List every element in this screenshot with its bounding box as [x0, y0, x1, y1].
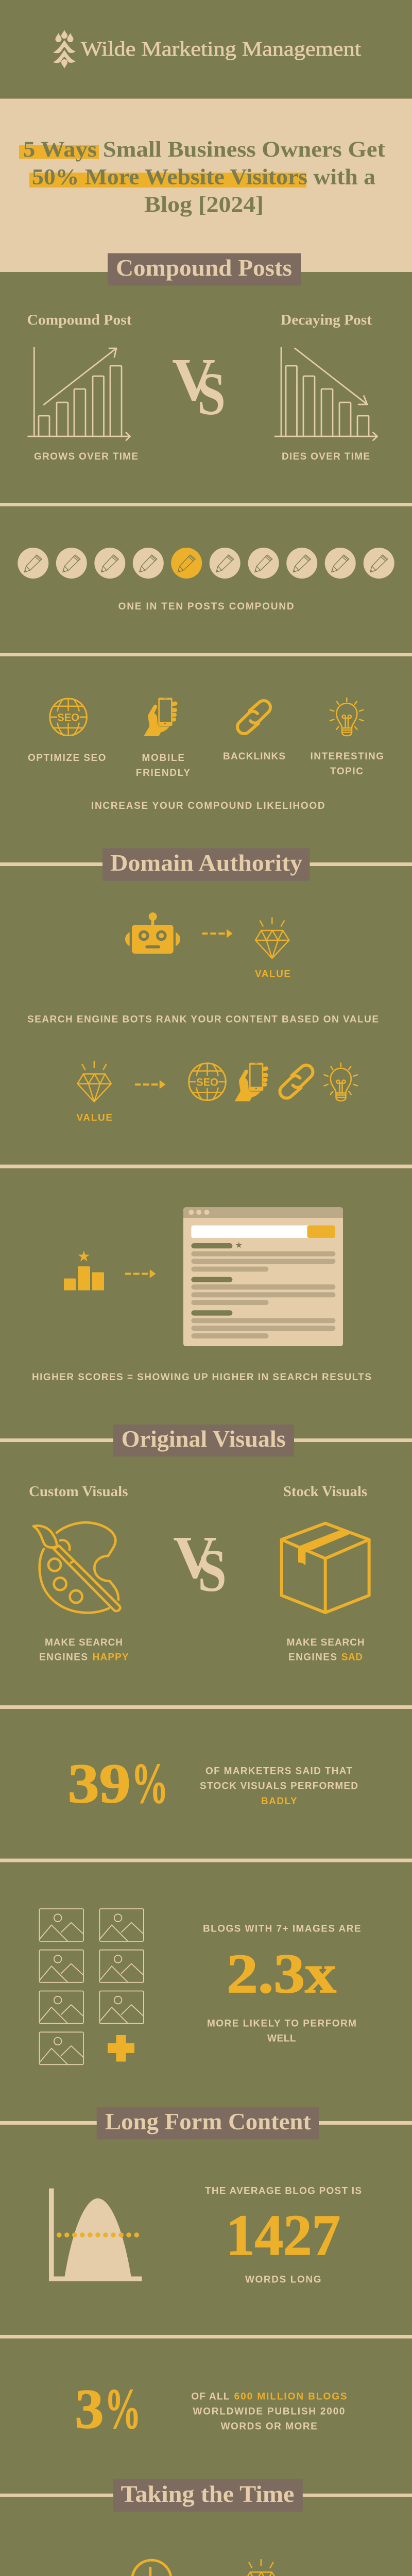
panel: stock visuals: MAKE SEARCH	[287, 1637, 365, 1648]
heading: Original Visuals: Original Visuals	[122, 1426, 286, 1452]
panel: compound post: Compound Post	[27, 312, 132, 328]
panel: compound factors: BACKLINKS	[223, 751, 285, 762]
stat: 2.3x: WELL	[267, 2033, 296, 2044]
icon: clock	[132, 2560, 171, 2576]
panel: compound factors: MOBILE	[142, 753, 184, 764]
arrow	[125, 1269, 156, 1278]
panel: compound factors: OPTIMIZE SEO	[28, 753, 106, 764]
panel: compound factors: TOPIC	[330, 766, 363, 777]
panel: stock visuals: Stock Visuals	[283, 1484, 367, 1500]
VS mark: V	[172, 346, 215, 413]
stat: 39%: BADLY	[261, 1796, 297, 1807]
stat: 3%	[75, 2377, 347, 2441]
header logo	[53, 30, 361, 69]
icon: mobile in hand	[144, 698, 175, 736]
icon: robot	[125, 912, 180, 954]
panel: custom visuals	[29, 1484, 129, 1663]
stat: 3%: %	[105, 2377, 141, 2441]
panel: decaying post: DIES OVER TIME	[282, 451, 370, 462]
icon: light bulb	[330, 698, 363, 736]
panel: compound factors: INTERESTING	[310, 751, 384, 762]
VS mark	[172, 346, 226, 428]
panel: one in ten posts: ONE IN TEN POSTS COMPOUND	[118, 601, 294, 612]
arrow	[202, 929, 233, 938]
icon: diamond	[77, 1061, 111, 1101]
heading: Compound Posts: Compound Posts	[116, 255, 292, 281]
panel: custom visuals: MAKE SEARCH	[45, 1637, 123, 1648]
stat: 2.3x: 2.3x	[227, 1943, 336, 2005]
panel: higher scores: HIGHER SCORES = SHOWING UP HIGHER IN SEARCH RESULTS	[32, 1372, 371, 1383]
stat: 1427: WORDS LONG	[245, 2275, 321, 2285]
panel: compound post: GROWS OVER TIME	[34, 451, 138, 462]
panel: bots rank on value: VALUE	[76, 1113, 112, 1123]
icon: podium with star	[64, 1250, 104, 1290]
icon: diamond	[255, 918, 289, 958]
VS mark: V	[173, 1523, 217, 1591]
panel: bots rank on value	[27, 912, 379, 1123]
stat: 39%: 39	[68, 1753, 131, 1815]
stat: 39%	[68, 1752, 358, 1816]
panel: compound factors: INCREASE YOUR COMPOUND LIKELIHOOD	[91, 801, 325, 811]
icon: mobile in hand	[235, 1063, 266, 1101]
panel: compound post	[27, 312, 138, 462]
icon: chain link	[280, 1065, 313, 1098]
panel: custom visuals: ENGINES	[39, 1652, 88, 1663]
stat: 3%: 3	[75, 2379, 104, 2440]
panel: bots rank on value: VALUE	[255, 969, 290, 980]
icon: cardboard box	[282, 1523, 369, 1613]
stat: 1427: 1427	[226, 2204, 340, 2267]
panel: decaying post: Decaying Post	[281, 312, 372, 328]
panel: decaying post	[275, 312, 377, 462]
panel: higher scores	[32, 1207, 371, 1383]
stat: 39%: %	[131, 1752, 168, 1816]
title panel	[0, 99, 412, 272]
panel: stock visuals: SAD	[341, 1652, 363, 1663]
icon: paint palette	[33, 1522, 120, 1613]
arrow	[135, 1080, 165, 1089]
panel: time to value	[62, 2560, 350, 2576]
title panel: 5 Ways Small Business Owners Get	[23, 138, 386, 162]
stat: 1427: THE AVERAGE BLOG POST IS	[205, 2185, 362, 2197]
panel: stock visuals	[282, 1484, 369, 1663]
stat: 39%: OF MARKETERS SAID THAT	[205, 1766, 352, 1777]
stat: 39%: STOCK VISUALS PERFORMED	[200, 1781, 358, 1792]
stat: 1427	[205, 2185, 362, 2285]
panel: one in ten posts	[18, 548, 394, 612]
VS mark: S	[198, 1537, 227, 1604]
stat: 3%: WORLDWIDE PUBLISH 2000	[193, 2406, 345, 2417]
image grid	[39, 1909, 144, 2064]
title panel: Blog [2024]	[144, 193, 264, 217]
icon: SEO globe	[50, 699, 87, 736]
panel: custom visuals: Custom Visuals	[29, 1484, 128, 1500]
stat: 2.3x	[203, 1923, 360, 2044]
heading: Domain Authority: Domain Authority	[110, 850, 302, 876]
browser search results	[183, 1207, 343, 1346]
stat: 3%: OF ALL	[191, 2392, 230, 2402]
chart: bell curve	[49, 2189, 142, 2281]
stat: 3%: 600 MILLION BLOGS	[234, 2392, 347, 2402]
chart: growing bars	[28, 347, 130, 440]
stat: 2.3x: BLOGS WITH 7+ IMAGES ARE	[203, 1923, 360, 1934]
icon: light bulb	[324, 1063, 357, 1100]
icon: SEO globe	[188, 1063, 226, 1100]
icon: chain link	[237, 701, 270, 734]
title panel: 50% More Website Visitors with a	[32, 165, 375, 190]
panel: compound factors	[28, 698, 384, 811]
icon: diamond	[244, 2560, 278, 2576]
chart: decaying bars	[275, 347, 377, 440]
VS mark: S	[197, 360, 226, 428]
heading: Taking the Time: Taking the Time	[121, 2481, 294, 2507]
panel: compound factors: FRIENDLY	[136, 768, 190, 778]
stat: 3%: WORDS OR MORE	[221, 2421, 317, 2432]
panel: custom visuals: HAPPY	[93, 1652, 129, 1663]
heading: Long Form Content: Long Form Content	[105, 2108, 312, 2134]
panel: stock visuals: ENGINES	[288, 1652, 337, 1663]
header logo: Wilde Marketing Management	[81, 37, 361, 60]
VS mark	[173, 1523, 227, 1604]
stat: 2.3x: MORE LIKELY TO PERFORM	[207, 2019, 356, 2029]
panel: bots rank on value: SEARCH ENGINE BOTS RANK YOUR CONTENT BASED ON VALUE	[27, 1014, 379, 1025]
